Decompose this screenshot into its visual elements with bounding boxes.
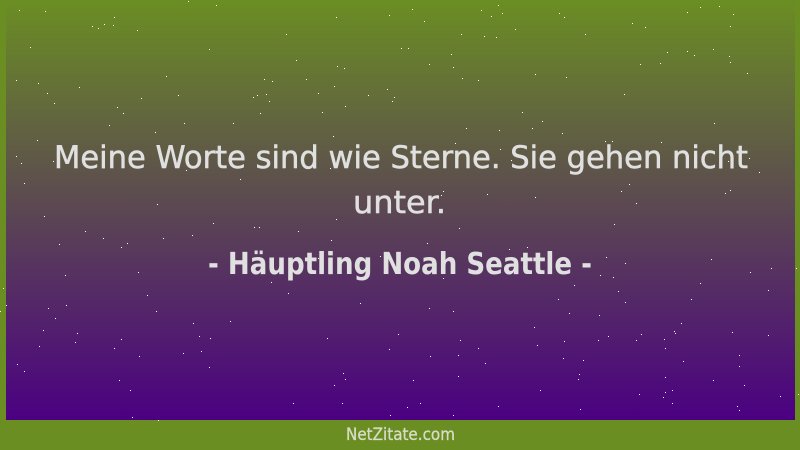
footer brand: NetZitate.com <box>346 425 455 444</box>
quote text: Meine Worte sind wie Sterne. Sie gehen nicht <box>54 140 748 176</box>
quote text: unter. <box>353 185 446 221</box>
author: - Häuptling Noah Seattle - <box>208 247 592 282</box>
quote text <box>54 140 748 221</box>
